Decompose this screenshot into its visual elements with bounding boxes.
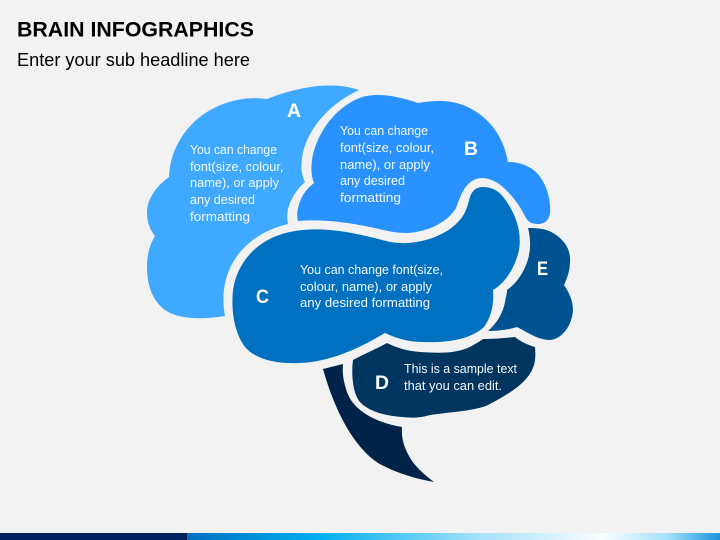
text B: font(size, colour, (340, 140, 434, 155)
label A: A (287, 100, 301, 122)
text C (300, 262, 443, 310)
label E: E (537, 258, 548, 280)
label D: D (375, 372, 389, 394)
text B: any desired (340, 173, 405, 188)
text A: name), or apply (190, 175, 279, 190)
text A: any desired (190, 192, 255, 207)
text B: name), or apply (340, 157, 430, 172)
text C: You can change font(size, (300, 262, 443, 277)
text A: formatting (190, 209, 250, 224)
sub headline: Enter your sub headline here (17, 50, 250, 70)
panel: brain lobe A (147, 85, 359, 318)
label C: C (256, 286, 269, 308)
text C: any desired formatting (300, 295, 430, 310)
text A: font(size, colour, (190, 159, 284, 174)
brain stem tail (323, 364, 434, 482)
panel: brain lobe D (352, 337, 535, 418)
panel: brain lobe E (488, 228, 573, 340)
footer bar (0, 533, 720, 540)
title: BRAIN INFOGRAPHICS (17, 18, 254, 42)
text D: that you can edit. (404, 378, 502, 393)
text A: You can change (190, 142, 277, 157)
panel: brain lobe B (297, 95, 550, 233)
panel: brain lobe C (232, 187, 520, 363)
label B: B (464, 138, 478, 160)
text B: formatting (340, 190, 401, 205)
text D (404, 361, 517, 393)
text B: You can change (340, 123, 428, 138)
text C: colour, name), or apply (300, 279, 432, 294)
text D: This is a sample text (404, 361, 517, 376)
text A (190, 142, 284, 224)
text B (340, 123, 434, 205)
